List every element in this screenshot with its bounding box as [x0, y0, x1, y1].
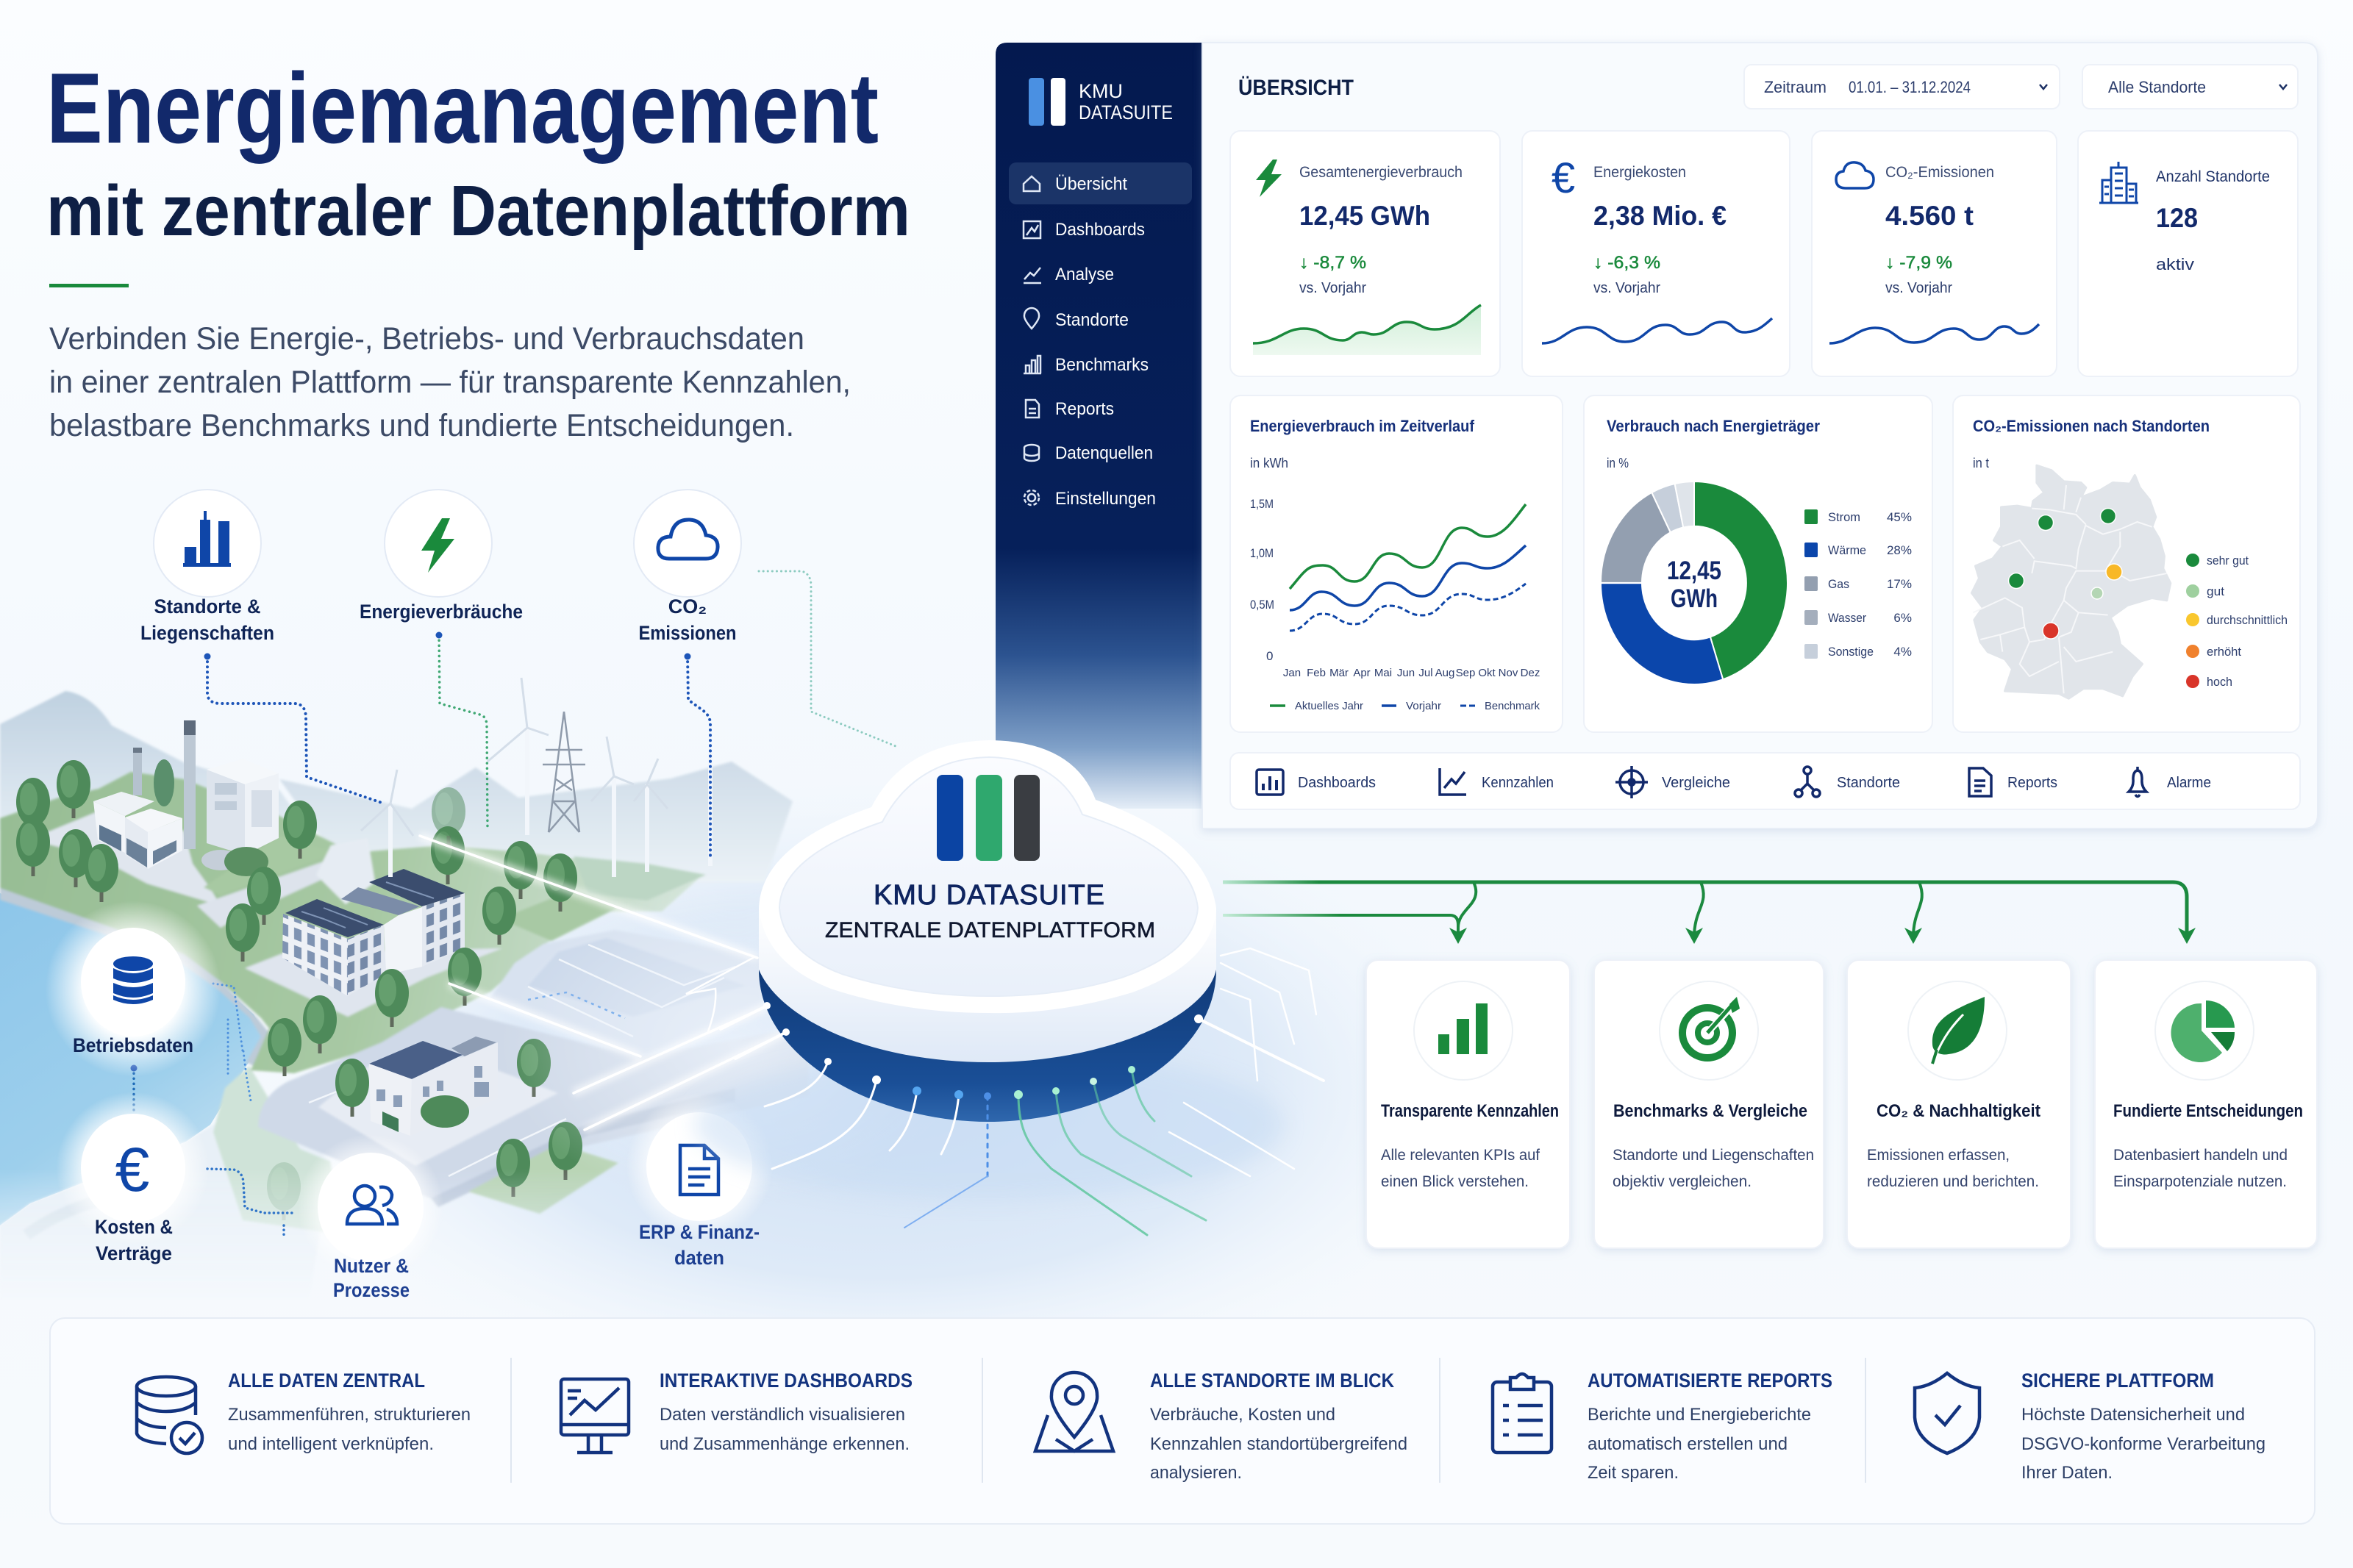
main office cluster — [282, 869, 465, 996]
KPI card: Energiekosten: Energiekosten — [1593, 164, 1686, 181]
filter: Zeitraum — [1744, 65, 2060, 109]
factory — [93, 720, 279, 876]
chart card: CO2-Emissionen nach Standorten: CO₂-Emissionen nach Standorten — [1973, 417, 2210, 435]
arrowheads — [1449, 928, 2196, 944]
donut legend: 4% — [1893, 645, 1912, 659]
cloud surface rim — [759, 740, 1216, 1013]
platform title: KMU DATASUITE — [874, 880, 1104, 911]
chart card: CO2-Emissionen nach Standorten: in t — [1973, 456, 1989, 470]
filter: Zeitraum: Zeitraum — [1764, 78, 1827, 96]
filter: Alle Standorte — [2082, 65, 2298, 109]
quick navigation bar: Dashboards — [1298, 775, 1376, 791]
icon: database check — [137, 1377, 202, 1453]
benefit: Alle Standorte im Blick: Kennzahlen standortübergreifend — [1150, 1434, 1407, 1454]
quick navigation bar: Alarme — [2167, 775, 2211, 791]
donut legend: 6% — [1893, 611, 1912, 625]
node: CO2 Emissionen: Emissionen — [638, 622, 737, 644]
icon: cloud — [1836, 162, 1874, 188]
icon: pie chart — [2171, 1003, 2222, 1062]
chart card: Energieverbrauch im Zeitverlauf: Sep — [1456, 667, 1475, 679]
main panel surface — [1202, 43, 2318, 828]
platform glow — [695, 1051, 1283, 1198]
result card: Transparente Kennzahlen — [1366, 960, 1570, 1248]
icon: bolt — [1256, 160, 1282, 197]
chart card: Energieverbrauch im Zeitverlauf: Mai — [1374, 667, 1392, 679]
node: CO2 Emissionen — [634, 490, 741, 644]
node: Energieverbräuche — [360, 490, 523, 623]
active menu highlight — [1009, 162, 1192, 204]
platform logo — [937, 775, 1040, 861]
result card: Benchmarks & Vergleiche: objektiv vergleichen. — [1613, 1173, 1752, 1190]
chart card: Verbrauch nach Energieträger: GWh — [1671, 584, 1718, 613]
icon: lightning bolt — [421, 518, 454, 573]
result card: CO2 & Nachhaltigkeit — [1847, 960, 2071, 1248]
platform wall — [759, 908, 1216, 1062]
chart card: Energieverbrauch im Zeitverlauf: in kWh — [1250, 456, 1288, 470]
KPI card: Energiekosten — [1522, 131, 1790, 376]
sparkline — [1542, 318, 1772, 343]
KPI card: Gesamtenergieverbrauch: ↓ -8,7 % — [1299, 253, 1366, 273]
icon: database — [113, 956, 153, 1004]
donut legend: 28% — [1887, 543, 1912, 557]
KPI card: CO2-Emissionen — [1812, 131, 2057, 376]
node: ERP & Finanzdaten — [626, 1093, 773, 1269]
result card: Fundierte Entscheidungen — [2095, 960, 2317, 1248]
result card: Benchmarks & Vergleiche: Benchmarks & Vergleiche — [1613, 1101, 1807, 1121]
intro text: Verbinden Sie Energie-, Betriebs- und Verbrauchsdaten — [49, 321, 804, 357]
benefit: Interaktive Dashboards: INTERAKTIVE DASHBOARDS — [660, 1370, 913, 1392]
sidebar navigation: Benchmarks — [1055, 355, 1149, 375]
connector: Betriebsdaten — [132, 1068, 135, 1115]
icon: clipboard — [1493, 1374, 1552, 1453]
result card: Transparente Kennzahlen: Transparente Kennzahlen — [1381, 1101, 1559, 1121]
chart card: Verbrauch nach Energieträger: 12,45 — [1667, 556, 1721, 585]
wind turbines and pylon — [361, 678, 710, 877]
chart card: Verbrauch nach Energieträger — [1584, 395, 1932, 732]
connector: Standorte — [207, 656, 384, 803]
benefit: Interaktive Dashboards: und Zusammenhänge erkennen. — [660, 1434, 910, 1454]
sparkline — [1829, 324, 2039, 343]
benefit: Automatisierte Reports: automatisch erstellen und — [1588, 1434, 1788, 1454]
connection points — [721, 948, 1324, 1235]
KPI card: Gesamtenergieverbrauch: 12,45 GWh — [1299, 201, 1430, 231]
sparkline — [1253, 305, 1481, 355]
connector: branch 1 — [1458, 882, 1476, 928]
benefit: Sichere Plattform: DSGVO-konforme Verarbeitung — [2021, 1434, 2265, 1454]
chart card: Energieverbrauch im Zeitverlauf — [1230, 395, 1563, 732]
donut legend — [1804, 509, 1912, 659]
benefit: Alle Standorte im Blick: ALLE STANDORTE IM BLICK — [1150, 1370, 1394, 1392]
connector: branch 3 — [1913, 882, 1922, 937]
result card: Transparente Kennzahlen: Alle relevanten KPIs auf — [1381, 1147, 1540, 1164]
chart card: Energieverbrauch im Zeitverlauf: Nov — [1499, 667, 1518, 679]
node: Standorte & Liegenschaften: Standorte & — [154, 595, 260, 617]
sidebar logo: KMU — [1079, 80, 1123, 102]
quick navigation bar — [1230, 753, 2300, 809]
quick navigation bar: Vergleiche — [1662, 775, 1730, 791]
chart card: Energieverbrauch im Zeitverlauf: Jul — [1418, 667, 1433, 679]
donut chart — [1601, 482, 1788, 684]
benefit: Sichere Plattform: SICHERE PLATTFORM — [2021, 1370, 2214, 1392]
connector: Emissionen — [688, 656, 710, 860]
connector: branch 2 — [1694, 882, 1704, 937]
chart legend — [1270, 700, 1540, 712]
icon: leaf — [1932, 997, 1985, 1054]
benefit: Automatisierte Reports: Berichte und Energieberichte — [1588, 1405, 1811, 1425]
node: Kosten & Verträge: Kosten & — [95, 1216, 173, 1238]
sidebar navigation: Analyse — [1055, 265, 1114, 284]
node: Nutzer & Prozesse: Prozesse — [333, 1279, 410, 1301]
line: Vorjahr — [1290, 545, 1526, 610]
chart card: Energieverbrauch im Zeitverlauf: Mär — [1329, 667, 1349, 679]
result card: Benchmarks & Vergleiche: Standorte und Liegenschaften — [1613, 1147, 1814, 1164]
sidebar navigation: Standorte — [1055, 310, 1129, 330]
chart card: Energieverbrauch im Zeitverlauf: Dez — [1521, 667, 1540, 679]
chart legend: Benchmark — [1485, 700, 1540, 712]
donut legend: 45% — [1887, 510, 1912, 524]
dashboard panel — [996, 43, 2318, 828]
KPI card: Anzahl Standorte: 128 — [2156, 203, 2198, 233]
sidebar navigation: Dashboards — [1055, 220, 1145, 240]
chart card: Energieverbrauch im Zeitverlauf: 1,0M — [1250, 546, 1274, 560]
chart card: Energieverbrauch im Zeitverlauf: Energieverbrauch im Zeitverlauf — [1250, 417, 1475, 435]
icon: monitor — [561, 1379, 629, 1453]
donut legend: Wasser — [1828, 611, 1866, 625]
node: Standorte & Liegenschaften — [140, 490, 274, 644]
haze over roads — [518, 953, 819, 1151]
KPI card: CO2-Emissionen: 4.560 t — [1885, 201, 1974, 231]
donut legend: Wärme — [1828, 543, 1866, 557]
cloud surface — [779, 757, 1198, 996]
road markings — [309, 945, 735, 1176]
result card: Fundierte Entscheidungen: Datenbasiert handeln und — [2113, 1147, 2288, 1164]
illustration: isometric landscape — [0, 678, 819, 1239]
result card: CO2 & Nachhaltigkeit: reduzieren und berichten. — [1867, 1173, 2039, 1190]
chart legend: Aktuelles Jahr — [1295, 700, 1363, 712]
sidebar navigation: Reports — [1055, 399, 1114, 419]
icon: euro: € — [1552, 154, 1575, 202]
KPI card: Anzahl Standorte — [2078, 131, 2298, 376]
central platform — [695, 740, 1324, 1235]
chart card: Energieverbrauch im Zeitverlauf: Aug — [1435, 667, 1454, 679]
sidebar logo — [1029, 78, 1173, 126]
benefit: Alle Standorte im Blick: Verbräuche, Kosten und — [1150, 1405, 1335, 1425]
data source nodes — [45, 490, 773, 1301]
sidebar logo: DATASUITE — [1079, 101, 1173, 123]
icon: document — [680, 1145, 718, 1195]
icon: cloud — [658, 520, 718, 559]
benefit: Alle Daten zentral — [137, 1370, 471, 1454]
platform subtitle: ZENTRALE DATENPLATTFORM — [825, 918, 1155, 942]
output connectors — [1223, 882, 2196, 944]
icon: euro: € — [115, 1135, 149, 1204]
result card: Fundierte Entscheidungen: Einsparpotenziale nutzen. — [2113, 1173, 2287, 1190]
benefit: Alle Daten zentral: Zusammenführen, strukturieren — [228, 1405, 471, 1425]
donut legend: Gas — [1828, 577, 1849, 591]
connector: Kosten — [207, 1169, 296, 1235]
map of Germany — [1972, 465, 2171, 698]
intro text — [49, 321, 851, 443]
sidebar navigation: Übersicht — [1055, 174, 1127, 194]
sidebar navigation — [1055, 174, 1156, 509]
map markers — [2009, 509, 2122, 639]
KPI card: Gesamtenergieverbrauch: vs. Vorjahr — [1299, 280, 1366, 296]
benefit: Automatisierte Reports — [1493, 1370, 1832, 1483]
trees — [16, 760, 582, 1220]
icon: map pin — [1035, 1372, 1113, 1451]
icon: buildings — [2099, 162, 2138, 203]
KPI card: Energiekosten: 2,38 Mio. € — [1593, 201, 1727, 231]
result card: Benchmarks & Vergleiche — [1594, 960, 1824, 1248]
chart card: Energieverbrauch im Zeitverlauf: 1,5M — [1250, 497, 1274, 511]
benefits band — [50, 1318, 2315, 1524]
node: Standorte & Liegenschaften: Liegenschaften — [140, 622, 274, 644]
donut legend: 17% — [1887, 577, 1912, 591]
accent rule — [49, 284, 129, 287]
node: Nutzer & Prozesse: Nutzer & — [334, 1255, 409, 1277]
sidebar icons — [1024, 176, 1041, 505]
chart card: Energieverbrauch im Zeitverlauf: Apr — [1353, 667, 1371, 679]
data light trails — [420, 836, 787, 1130]
benefit: Sichere Plattform — [1915, 1370, 2265, 1483]
line: Aktuelles Jahr — [1290, 504, 1526, 589]
benefit: Sichere Plattform: Ihrer Daten. — [2021, 1463, 2113, 1483]
quick navigation bar: Reports — [2007, 775, 2057, 791]
map legend: erhöht — [2207, 645, 2241, 659]
filter: Zeitraum: 01.01. – 31.12.2024 — [1849, 78, 1971, 96]
benefit: Alle Daten zentral: und intelligent verknüpfen. — [228, 1434, 434, 1454]
result card: Fundierte Entscheidungen: Fundierte Entscheidungen — [2113, 1101, 2303, 1121]
chart card: Energieverbrauch im Zeitverlauf: Feb — [1307, 667, 1326, 679]
quick navigation icons — [1257, 766, 2146, 798]
icon: users — [347, 1186, 397, 1224]
benefit: Alle Standorte im Blick — [1035, 1370, 1407, 1483]
node: Kosten & Verträge: Verträge — [96, 1242, 172, 1264]
connector: Energieverbräuche — [439, 635, 488, 831]
node: Nutzer & Prozesse — [297, 1134, 444, 1301]
connector: main green line — [1223, 882, 2187, 937]
node: Betriebsdaten — [45, 901, 221, 1077]
KPI card: CO2-Emissionen: CO₂-Emissionen — [1885, 164, 1994, 181]
chart card: Verbrauch nach Energieträger: in % — [1607, 456, 1629, 470]
filter: Alle Standorte: Alle Standorte — [2108, 78, 2206, 96]
node: ERP & Finanzdaten: daten — [674, 1247, 724, 1269]
benefit: Automatisierte Reports: AUTOMATISIERTE REPORTS — [1588, 1370, 1832, 1392]
donut legend: Sonstige — [1828, 645, 1874, 659]
sidebar navigation: Einstellungen — [1055, 489, 1156, 509]
icon: bars — [1438, 1003, 1488, 1054]
connector: water branch — [213, 984, 251, 1100]
platform base — [759, 970, 1216, 1122]
lower office — [369, 1037, 498, 1136]
node: Kosten & Verträge — [56, 1092, 210, 1264]
node: Betriebsdaten: Betriebsdaten — [73, 1034, 193, 1056]
mountains — [0, 691, 793, 882]
chart card: Energieverbrauch im Zeitverlauf: Jan — [1283, 667, 1301, 679]
quick navigation bar: Kennzahlen — [1482, 775, 1554, 791]
land and roads — [0, 770, 737, 1239]
chart card: Energieverbrauch im Zeitverlauf: 0 — [1266, 649, 1273, 663]
chart card: Energieverbrauch im Zeitverlauf: Okt — [1478, 667, 1496, 679]
result card: CO2 & Nachhaltigkeit: CO₂ & Nachhaltigkeit — [1877, 1101, 2040, 1121]
intro text: belastbare Benchmarks und fundierte Entscheidungen. — [49, 408, 794, 443]
icon: target — [1682, 1001, 1735, 1058]
benefit: Alle Standorte im Blick: analysieren. — [1150, 1463, 1242, 1483]
node: ERP & Finanzdaten: ERP & Finanz- — [639, 1221, 760, 1243]
map legend: gut — [2207, 584, 2224, 598]
KPI card: CO2-Emissionen: vs. Vorjahr — [1885, 280, 1952, 296]
benefit: Sichere Plattform: Höchste Datensicherheit und — [2021, 1405, 2245, 1425]
quick navigation bar: Standorte — [1837, 775, 1900, 791]
donut legend: Strom — [1828, 510, 1860, 524]
map legend: sehr gut — [2207, 554, 2249, 568]
map legend: hoch — [2207, 675, 2232, 689]
water — [0, 893, 266, 1225]
map legend: durchschnittlich — [2207, 613, 2288, 627]
connector end dots — [131, 632, 691, 1072]
KPI card: Gesamtenergieverbrauch — [1230, 131, 1500, 376]
benefit: Automatisierte Reports: Zeit sparen. — [1588, 1463, 1679, 1483]
chart legend: Vorjahr — [1406, 700, 1441, 712]
benefit: Interaktive Dashboards: Daten verständlich visualisieren — [660, 1405, 905, 1425]
intro text: in einer zentralen Plattform — für transparente Kennzahlen, — [49, 365, 851, 400]
KPI card: Anzahl Standorte: Anzahl Standorte — [2156, 168, 2270, 185]
icon: bar chart — [183, 511, 231, 567]
subtitle: mit zentraler Datenplattform — [46, 171, 910, 251]
KPI card: Energiekosten: vs. Vorjahr — [1593, 280, 1660, 296]
KPI card: CO2-Emissionen: ↓ -7,9 % — [1885, 253, 1952, 273]
chart card: Energieverbrauch im Zeitverlauf: 0,5M — [1250, 598, 1274, 612]
connector: cloud to platform — [759, 571, 896, 746]
line: Benchmark — [1290, 584, 1526, 631]
icon: shield — [1915, 1373, 1979, 1453]
result card: CO2 & Nachhaltigkeit: Emissionen erfassen, — [1867, 1147, 2010, 1164]
heading: Übersicht: ÜBERSICHT — [1238, 76, 1354, 100]
map legend — [2186, 554, 2288, 689]
sidebar — [996, 43, 1206, 809]
chart card: Verbrauch nach Energieträger: Verbrauch nach Energieträger — [1607, 417, 1820, 435]
node: CO2 Emissionen: CO₂ — [668, 595, 707, 617]
title: Energiemanagement — [46, 52, 879, 164]
KPI card: Gesamtenergieverbrauch: Gesamtenergieverbrauch — [1299, 164, 1463, 181]
node: Energieverbräuche: Energieverbräuche — [360, 601, 523, 623]
result card: Transparente Kennzahlen: einen Blick verstehen. — [1381, 1173, 1529, 1190]
sidebar navigation: Datenquellen — [1055, 443, 1153, 463]
dotted connectors — [131, 571, 896, 1235]
benefit: Interaktive Dashboards — [561, 1370, 913, 1454]
chart card: CO2-Emissionen nach Standorten — [1953, 395, 2300, 732]
KPI card: Anzahl Standorte: aktiv — [2156, 255, 2194, 273]
KPI card: Energiekosten: ↓ -6,3 % — [1593, 253, 1660, 273]
benefit: Alle Daten zentral: ALLE DATEN ZENTRAL — [228, 1370, 425, 1392]
connector: second green line — [1223, 915, 1458, 937]
chart card: Energieverbrauch im Zeitverlauf: Jun — [1397, 667, 1415, 679]
